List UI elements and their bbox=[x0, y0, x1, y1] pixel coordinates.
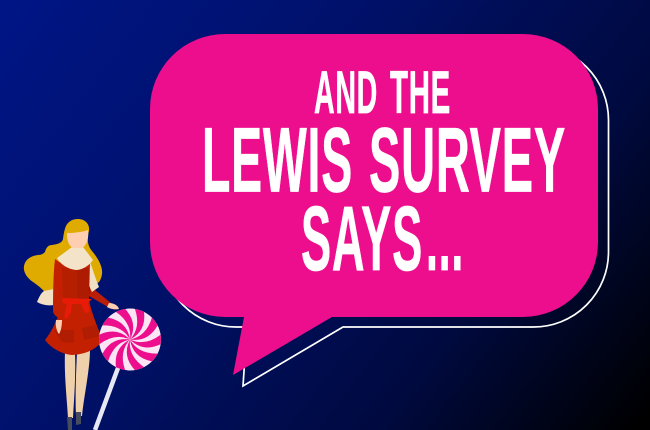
heading line: lewis survey: LEWIS bbox=[202, 110, 353, 212]
hair bbox=[24, 219, 102, 292]
speech bubble shadow outline bbox=[161, 45, 608, 386]
lollipop head bbox=[99, 308, 161, 371]
right shoulder wrap bbox=[86, 262, 99, 292]
belt bbox=[62, 298, 92, 319]
candy swirl bbox=[99, 308, 161, 371]
candy disc bbox=[99, 308, 161, 370]
far arm bbox=[89, 286, 111, 307]
coat pockets bbox=[54, 325, 100, 343]
near arm bbox=[53, 259, 63, 317]
coat bbox=[45, 262, 103, 355]
lollipop stick bbox=[95, 368, 118, 430]
heading line: says: SAYS bbox=[301, 188, 423, 290]
sleeve cuff bbox=[37, 289, 54, 305]
headline: ... bbox=[426, 188, 464, 290]
legs bbox=[65, 352, 75, 418]
coat shade bbox=[62, 268, 77, 300]
near hand bbox=[56, 320, 62, 334]
scarf bbox=[57, 247, 93, 270]
speech bubble bbox=[150, 34, 598, 375]
boots bbox=[67, 412, 81, 430]
heading line: says bbox=[301, 188, 464, 290]
headline bbox=[202, 59, 566, 290]
headline: THE bbox=[390, 59, 451, 126]
illustration: woman with lollipop bbox=[24, 219, 161, 430]
hand bbox=[107, 303, 119, 309]
heading line: and the: AND bbox=[314, 59, 378, 126]
face bbox=[67, 230, 88, 248]
